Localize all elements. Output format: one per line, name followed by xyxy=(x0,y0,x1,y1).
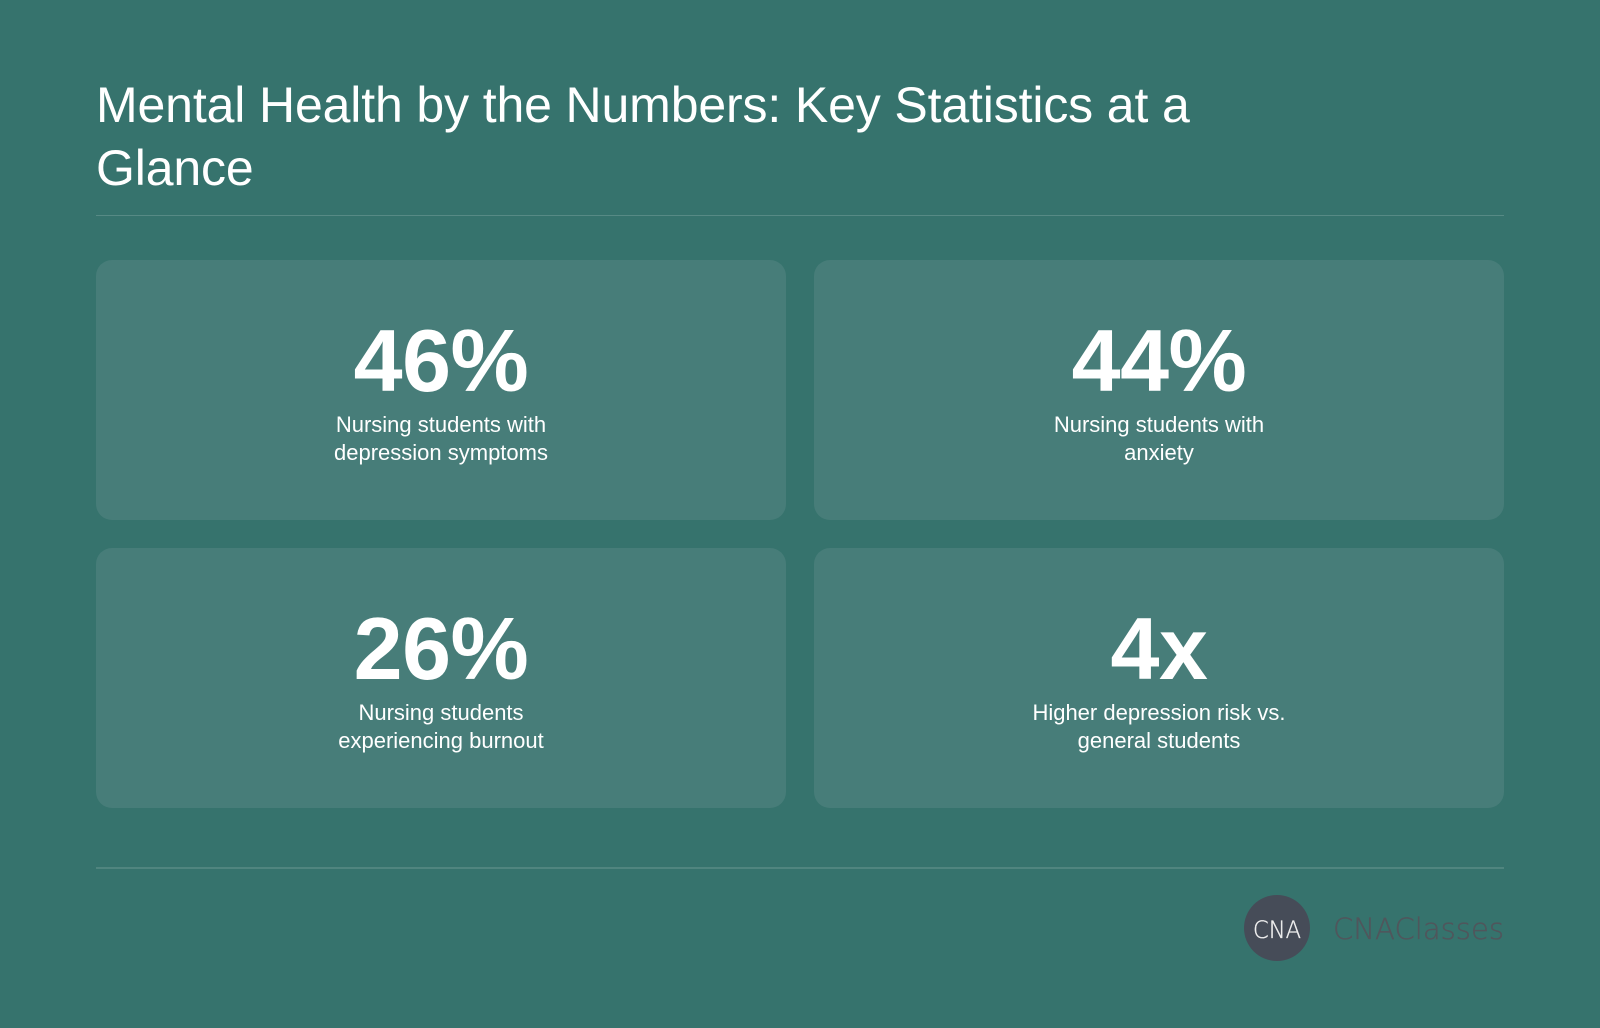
icon: CNA circle: CNA xyxy=(1253,916,1301,944)
logo: CNAClasses xyxy=(1244,895,1504,961)
stat label: anxiety xyxy=(1124,440,1194,465)
title xyxy=(96,77,1190,196)
stat label: Nursing students xyxy=(358,700,524,725)
stat label: Nursing students with xyxy=(336,412,546,437)
panel: 44% anxiety xyxy=(814,260,1504,520)
stat label xyxy=(338,700,544,753)
panel: 4x depression risk xyxy=(814,548,1504,808)
stat label: general students xyxy=(1078,728,1240,753)
stat label: depression symptoms xyxy=(334,440,548,465)
stat label: experiencing burnout xyxy=(338,728,544,753)
logo wordmark: CNAClasses xyxy=(1333,912,1504,946)
stat label: Nursing students with xyxy=(1054,412,1264,437)
stat label xyxy=(334,412,548,465)
stat label: Higher depression risk vs. xyxy=(1032,700,1286,725)
stat label xyxy=(1054,412,1264,465)
stat number: 4x xyxy=(1111,599,1207,698)
stat number: 44% xyxy=(1072,311,1246,410)
stat label xyxy=(1032,700,1286,753)
panel: 26% burnout xyxy=(96,548,786,808)
stat number: 46% xyxy=(354,311,528,410)
panel: 46% depression symptoms xyxy=(96,260,786,520)
title: Glance xyxy=(96,140,254,196)
stat number: 26% xyxy=(354,599,528,698)
icon: CNA circle xyxy=(1244,895,1310,961)
title: Mental Health by the Numbers: Key Statistics at a xyxy=(96,77,1190,133)
